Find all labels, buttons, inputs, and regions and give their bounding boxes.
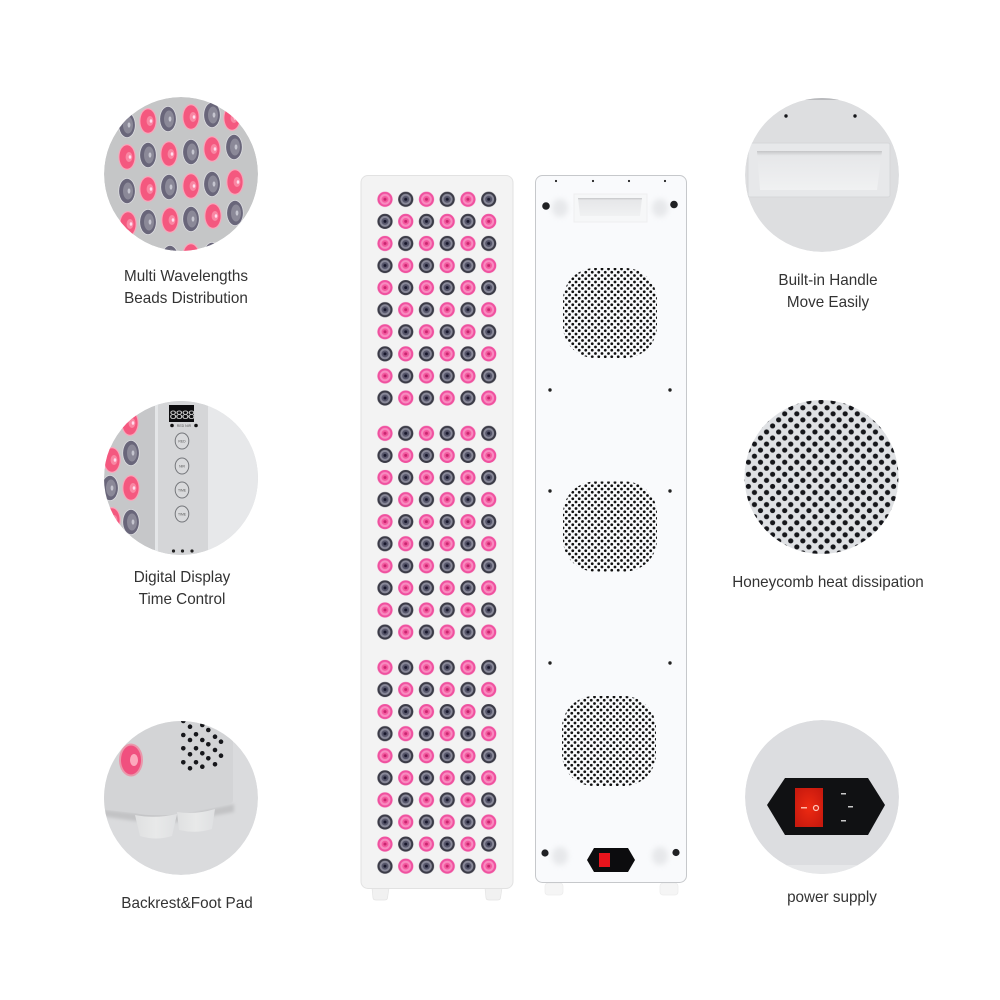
partial beads [101,410,140,535]
button captions: TIME [178,512,187,516]
right side panel [208,406,258,550]
LED time display: 8888 [169,408,195,423]
mounting screws [541,201,680,857]
fan grille: bottom [562,697,658,785]
label: honeycomb heat dissipation: Honeycomb heat dissipation [732,574,924,591]
circle: multi wavelength beads [104,97,258,251]
indicator row [170,424,198,428]
label: multi wavelengths: Beads Distribution [124,290,248,307]
label: digital display: Digital Display [134,569,230,586]
circle background [745,720,899,874]
LED bead block: middle [375,422,499,643]
angled bead rows [118,102,244,251]
device body [100,715,233,815]
side screw dots [548,388,672,665]
circle: foot pad [100,715,258,875]
circle: honeycomb grille [744,400,898,554]
handle recess [757,151,882,190]
socket plate [767,778,885,835]
label: power supply: power supply [787,889,877,906]
circle background [104,97,258,251]
circle: built-in handle [745,97,899,252]
panel: back of device [536,176,686,895]
circle background [745,98,899,252]
circle: power supply [745,720,900,875]
control strip [155,400,158,556]
label: multi wavelengths: Multi Wavelengths [124,268,248,285]
label: built-in handle: Move Easily [787,294,869,311]
mount shadows [552,199,668,865]
top edge [805,98,839,100]
button captions: NIR [179,464,185,468]
button captions [178,440,186,516]
LED bead block: top [375,188,499,409]
fan grille: top [563,269,659,357]
panel body [361,176,513,888]
switch symbols [801,806,818,810]
rocker switch [795,788,823,827]
first foot [135,814,177,838]
panel feet [372,888,502,900]
back panel feet [545,883,678,895]
indicator row: RED NIR [177,424,192,428]
panel: front LED panel [361,176,513,900]
bottom dots [172,549,194,553]
handle frame [748,143,890,197]
fan grille: middle [563,482,659,570]
top screw dots [555,180,666,182]
second foot [177,809,215,832]
infographic canvas [104,97,923,908]
handle [574,194,647,222]
button captions: RED [178,440,186,444]
bottom edge [787,865,857,874]
circle: digital display [101,400,260,556]
button captions: TIME [178,488,187,492]
back panel body [536,176,686,882]
under-body shadow [100,804,234,822]
circle background [105,742,258,875]
honeycomb holes [744,400,898,554]
LED bead [119,744,143,776]
vent holes [181,719,223,771]
label: built-in handle: Built-in Handle [778,272,878,289]
socket pins [841,793,853,822]
control buttons [175,433,189,522]
screw holes [784,114,857,118]
LED bead block: bottom [375,656,499,877]
circle background [104,406,155,550]
label: backrest and foot pad: Backrest&Foot Pad [121,895,253,912]
label: digital display: Time Control [139,591,225,608]
power switch [587,848,635,872]
